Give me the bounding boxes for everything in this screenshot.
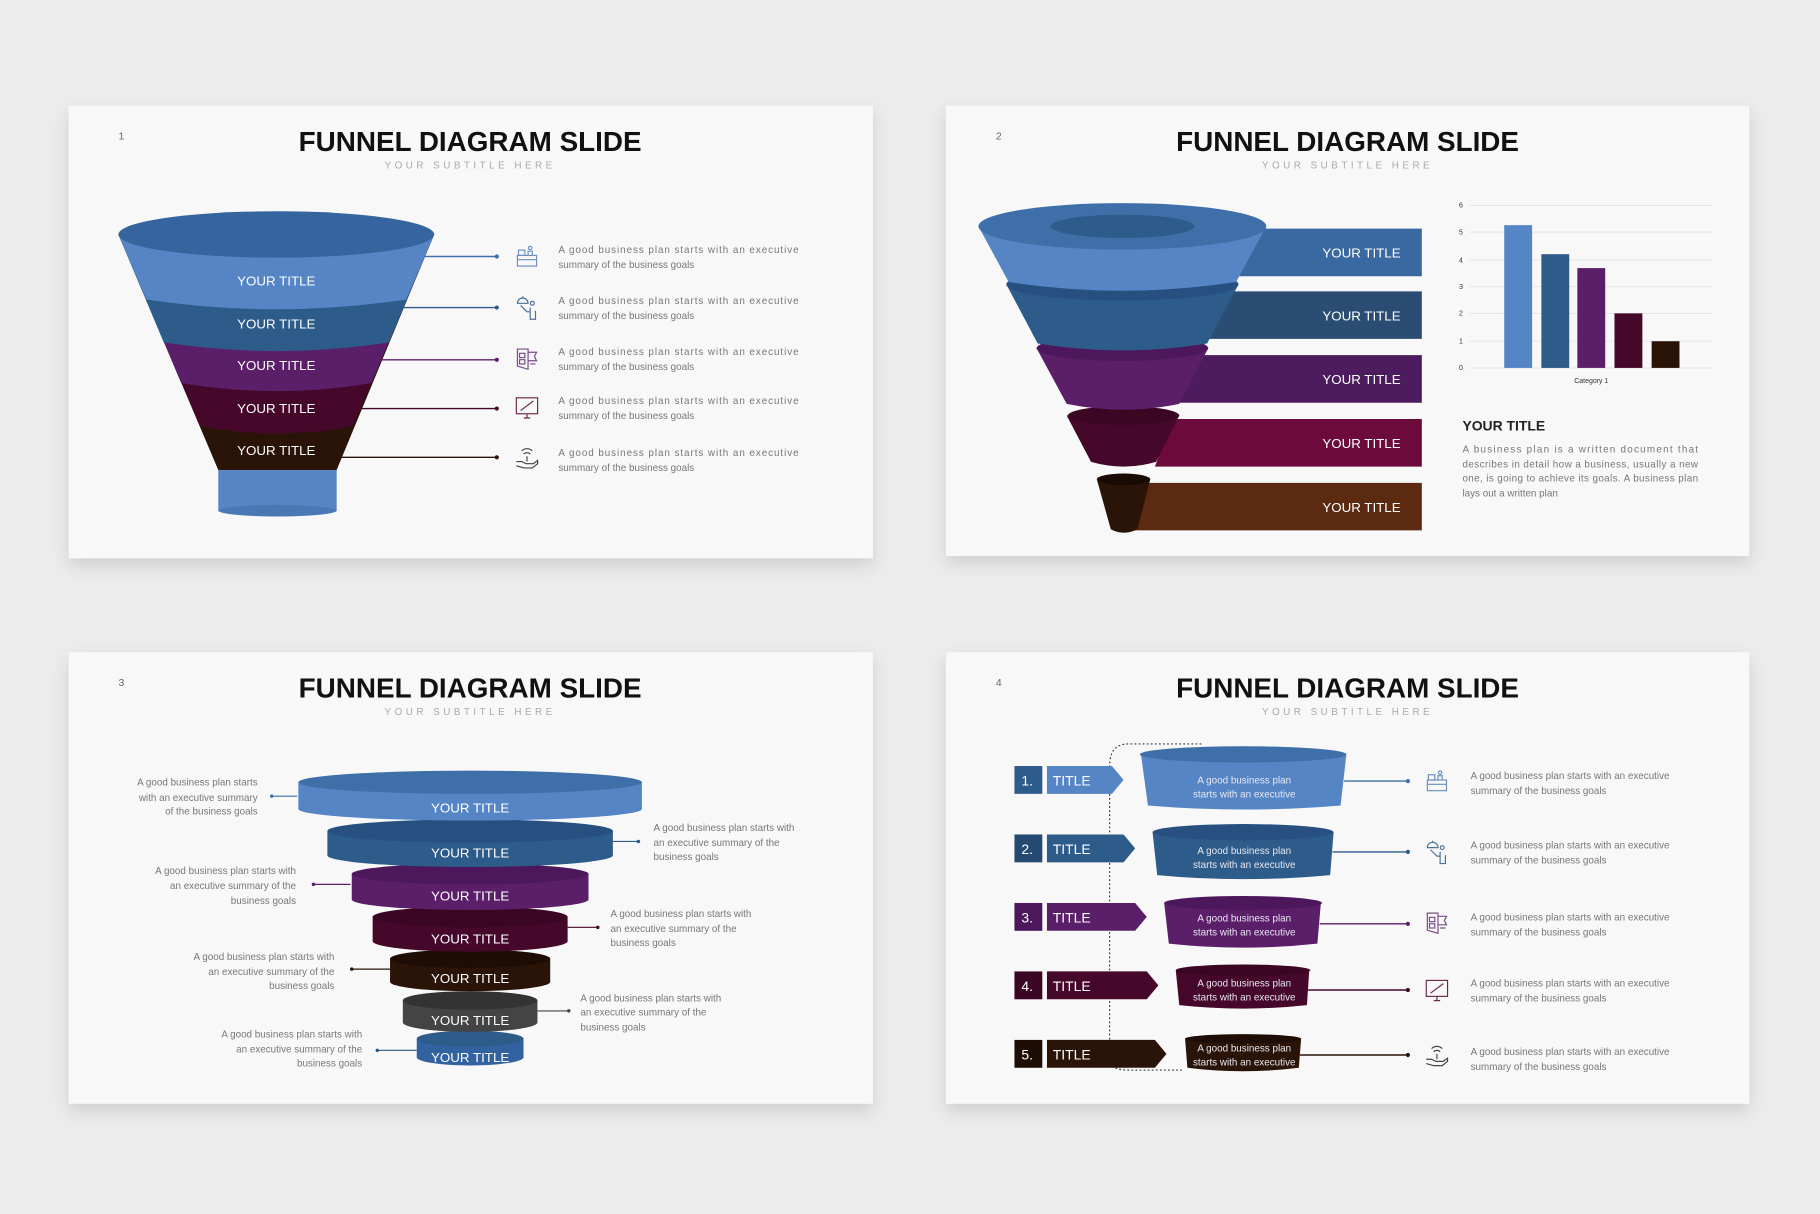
bar chart: 6	[1459, 203, 1463, 210]
title bars: YOUR TITLE	[1322, 308, 1401, 323]
slide number 1: 1	[118, 131, 124, 142]
cylinder segments: A good business plan	[1197, 1044, 1291, 1055]
text block slide 2: one, is going to achieve its goals. A business plan	[1462, 474, 1698, 485]
description texts slide 1: summary of the business goals	[558, 411, 694, 422]
description texts slide 4: summary of the business goals	[1471, 855, 1607, 866]
description texts slide 4: A good business plan starts with an executive	[1471, 771, 1670, 782]
description texts slide 4: summary of the business goals	[1471, 927, 1607, 938]
subtitle slide 1: YOUR SUBTITLE HERE	[385, 160, 556, 171]
description texts slide 1: A good business plan starts with an executive	[558, 245, 799, 256]
stacked discs: YOUR TITLE	[431, 971, 509, 986]
stacked discs: YOUR TITLE	[431, 1050, 509, 1065]
numbered title tabs	[1014, 766, 1166, 1068]
description texts slide 1: A good business plan starts with an executive	[558, 347, 799, 358]
side descriptions slide 3: business goals	[580, 1023, 646, 1034]
cylinder segments: starts with an executive	[1193, 860, 1296, 871]
funnel chart: YOUR TITLE	[237, 443, 316, 458]
title bars: YOUR TITLE	[1322, 372, 1401, 387]
description texts slide 1: summary of the business goals	[558, 260, 694, 271]
side descriptions slide 3: A good business plan starts with	[611, 909, 751, 920]
description texts slide 1: A good business plan starts with an executive	[558, 296, 799, 307]
text block slide 2	[1462, 418, 1699, 500]
cylinder segments: starts with an executive	[1193, 789, 1296, 800]
funnel chart: YOUR TITLE	[237, 401, 316, 416]
title slide 2: FUNNEL DIAGRAM SLIDE	[1176, 126, 1519, 157]
side descriptions slide 3: an executive summary of the	[580, 1008, 707, 1019]
side descriptions slide 3: A good business plan starts with	[193, 952, 334, 963]
side descriptions slide 3: A good business plan starts	[137, 778, 258, 789]
numbered title tabs: TITLE	[1053, 841, 1091, 857]
funnel chart: YOUR TITLE	[237, 316, 316, 331]
subtitle slide 3: YOUR SUBTITLE HERE	[385, 707, 556, 718]
title slide 4: FUNNEL DIAGRAM SLIDE	[1176, 673, 1519, 704]
slide number 2: 2	[996, 131, 1002, 142]
slide number 4: 4	[996, 678, 1002, 689]
cylinder segments: starts with an executive	[1193, 992, 1296, 1003]
numbered title tabs: 4.	[1021, 978, 1033, 994]
icons slide 1	[516, 246, 538, 468]
connector lines slide 4	[1300, 779, 1410, 1057]
bar chart	[1459, 203, 1712, 385]
description texts slide 4: summary of the business goals	[1471, 1062, 1607, 1073]
cylinder segments: A good business plan	[1197, 979, 1291, 990]
side descriptions slide 3: an executive summary of the	[170, 881, 297, 892]
text block slide 2: lays out a written plan	[1462, 489, 1558, 500]
subtitle slide 4: YOUR SUBTITLE HERE	[1262, 707, 1433, 718]
numbered title tabs: TITLE	[1053, 773, 1091, 789]
title bars: YOUR TITLE	[1322, 246, 1401, 261]
numbered title tabs: TITLE	[1053, 1047, 1091, 1063]
title slide 1: FUNNEL DIAGRAM SLIDE	[299, 126, 642, 157]
bar chart: 3	[1459, 284, 1463, 291]
text block slide 2: describes in detail how a business, usually a new	[1462, 460, 1699, 471]
title slide 3: FUNNEL DIAGRAM SLIDE	[299, 673, 642, 704]
stacked discs	[298, 771, 642, 1065]
slide number 3: 3	[118, 678, 124, 689]
cylinder segments: starts with an executive	[1193, 927, 1296, 938]
connector lines	[339, 254, 499, 459]
text block slide 2: YOUR TITLE	[1462, 418, 1545, 434]
title bars: YOUR TITLE	[1322, 436, 1401, 451]
panel: slide 2	[946, 106, 1749, 556]
cylinder segments: A good business plan	[1197, 914, 1291, 925]
bar chart: 1	[1459, 339, 1463, 346]
side descriptions slide 3	[137, 778, 794, 1070]
description texts slide 1: A good business plan starts with an executive	[558, 396, 799, 407]
description texts slide 4: A good business plan starts with an executive	[1471, 1047, 1670, 1058]
panel: slide 1	[69, 106, 873, 558]
text block slide 2: A business plan is a written document that	[1462, 445, 1698, 456]
numbered title tabs: TITLE	[1053, 910, 1091, 926]
numbered title tabs: 1.	[1021, 773, 1033, 789]
stacked discs: YOUR TITLE	[431, 846, 509, 861]
funnel chart: YOUR TITLE	[237, 358, 316, 373]
description texts slide 1: summary of the business goals	[558, 311, 694, 322]
panel: slide 3	[69, 652, 873, 1104]
side descriptions slide 3: an executive summary of the	[654, 838, 780, 849]
description texts slide 4: A good business plan starts with an executive	[1471, 840, 1670, 851]
subtitle slide 2: YOUR SUBTITLE HERE	[1262, 160, 1433, 171]
description texts slide 4: summary of the business goals	[1471, 994, 1607, 1005]
side descriptions slide 3: A good business plan starts with	[654, 823, 794, 834]
cylinder segments: A good business plan	[1197, 775, 1291, 786]
description texts slide 1	[558, 245, 799, 474]
cylinder segments: A good business plan	[1197, 846, 1291, 857]
side descriptions slide 3: business goals	[269, 981, 334, 992]
bar chart: 2	[1459, 311, 1463, 318]
panel: slide 4	[946, 652, 1749, 1104]
description texts slide 1: summary of the business goals	[558, 362, 694, 373]
title bars: YOUR TITLE	[1322, 500, 1401, 515]
stacked discs: YOUR TITLE	[431, 932, 509, 947]
stacked discs: YOUR TITLE	[431, 1013, 509, 1028]
funnel chart	[118, 211, 434, 516]
bar chart: 0	[1459, 365, 1463, 372]
description texts slide 4: A good business plan starts with an executive	[1471, 912, 1670, 923]
description texts slide 1: A good business plan starts with an executive	[558, 448, 799, 459]
stacked discs: YOUR TITLE	[431, 800, 509, 815]
numbered title tabs: 3.	[1021, 910, 1033, 926]
numbered title tabs: TITLE	[1053, 978, 1091, 994]
side descriptions slide 3: an executive summary of the	[611, 924, 737, 935]
side descriptions slide 3: an executive summary of the	[208, 967, 335, 978]
description texts slide 4	[1471, 771, 1670, 1073]
icons slide 4	[1426, 771, 1448, 1066]
side descriptions slide 3: an executive summary of the	[236, 1045, 363, 1056]
bar chart: 4	[1459, 257, 1463, 264]
title bars	[1132, 229, 1422, 530]
bar chart: Category 1	[1574, 378, 1608, 385]
numbered title tabs: 2.	[1021, 841, 1033, 857]
side descriptions slide 3: business goals	[231, 896, 296, 907]
stacked funnel rings	[978, 203, 1266, 533]
dotted connector	[1110, 744, 1201, 1070]
cylinder segments: starts with an executive	[1193, 1057, 1296, 1068]
description texts slide 1: summary of the business goals	[558, 463, 694, 474]
stacked discs: YOUR TITLE	[431, 889, 509, 904]
side descriptions slide 3: A good business plan starts with	[155, 866, 296, 877]
side descriptions slide 3: with an executive summary	[138, 793, 258, 804]
bar chart: 5	[1459, 229, 1463, 236]
side descriptions slide 3: of the business goals	[165, 807, 258, 818]
side descriptions slide 3: business goals	[297, 1059, 362, 1070]
side descriptions slide 3: A good business plan starts with	[221, 1030, 362, 1041]
side descriptions slide 3: A good business plan starts with	[580, 994, 721, 1005]
description texts slide 4: A good business plan starts with an executive	[1471, 979, 1670, 990]
side descriptions slide 3: business goals	[611, 938, 676, 949]
numbered title tabs: 5.	[1021, 1047, 1033, 1063]
description texts slide 4: summary of the business goals	[1471, 786, 1607, 797]
funnel chart: YOUR TITLE	[237, 274, 316, 289]
side descriptions slide 3: business goals	[654, 852, 719, 863]
cylinder segments	[1140, 746, 1346, 1071]
